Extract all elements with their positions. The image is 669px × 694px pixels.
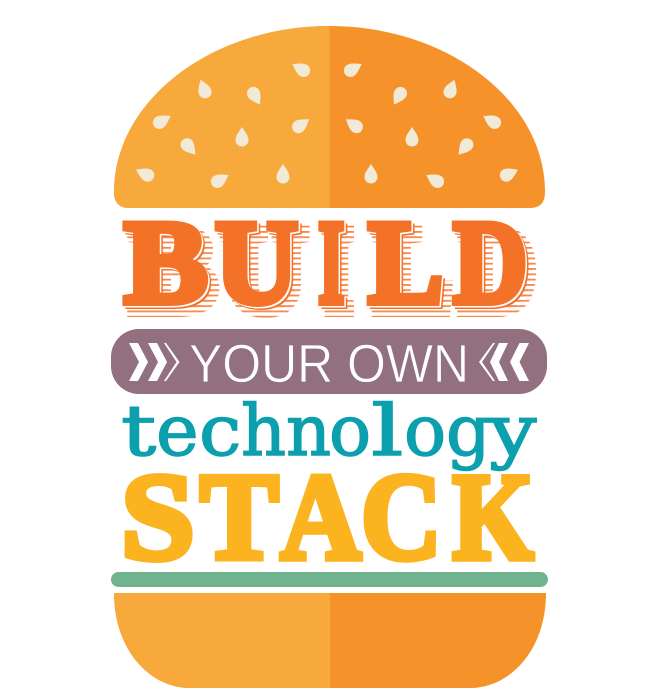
heading: BUILD: L: [368, 196, 443, 329]
heading: STACK: K: [452, 448, 534, 586]
heading: STACK: C: [361, 448, 442, 586]
heading: technology: [121, 390, 537, 472]
sesame seeds: [133, 58, 521, 190]
heading: BUILD: U: [215, 196, 298, 329]
banner: YOUR OWN: [111, 329, 547, 394]
heading: technology: n: [286, 390, 331, 472]
top bun: [114, 26, 545, 208]
heading: BUILD: U: [218, 199, 301, 332]
heading: BUILD: U: [223, 204, 306, 337]
heading: BUILD: B: [126, 197, 210, 330]
heading: BUILD: D: [453, 196, 528, 329]
heading: STACK: S: [121, 448, 195, 586]
heading: BUILD: D: [456, 199, 531, 332]
heading: BUILD: L: [371, 199, 446, 332]
bottom bun: [114, 593, 546, 688]
heading: BUILD: I: [320, 198, 346, 331]
heading: BUILD: L: [376, 204, 451, 337]
heading: BUILD: D: [454, 198, 529, 331]
heading: technology: y: [488, 391, 537, 472]
heading: BUILD: I: [318, 197, 345, 330]
heading: BUILD: B: [124, 195, 208, 329]
heading: BUILD: I: [326, 205, 353, 338]
heading: BUILD: L: [370, 198, 445, 331]
heading: technology: e: [156, 390, 199, 472]
heading: BUILD: U: [216, 198, 300, 331]
left chevrons: [129, 343, 180, 381]
heading: technology: h: [241, 390, 286, 472]
right chevrons: [479, 343, 529, 381]
heading: technology: l: [371, 390, 403, 472]
heading: technology: o: [404, 390, 446, 472]
heading: technology: c: [199, 391, 241, 472]
heading: STACK: A: [280, 448, 361, 586]
heading: technology: g: [446, 390, 491, 472]
heading: BUILD: [124, 195, 536, 338]
heading: technology: t: [121, 390, 156, 472]
heading: BUILD: B: [127, 198, 211, 332]
heading: STACK: [121, 448, 534, 586]
heading: BUILD: B: [132, 203, 216, 337]
green lettuce bar: [111, 572, 548, 587]
heading: BUILD: I: [321, 200, 348, 333]
heading: technology: o: [329, 390, 371, 472]
banner text: YOUR OWN: [189, 334, 469, 394]
heading: BUILD: D: [461, 204, 536, 337]
heading: STACK: T: [200, 449, 279, 586]
